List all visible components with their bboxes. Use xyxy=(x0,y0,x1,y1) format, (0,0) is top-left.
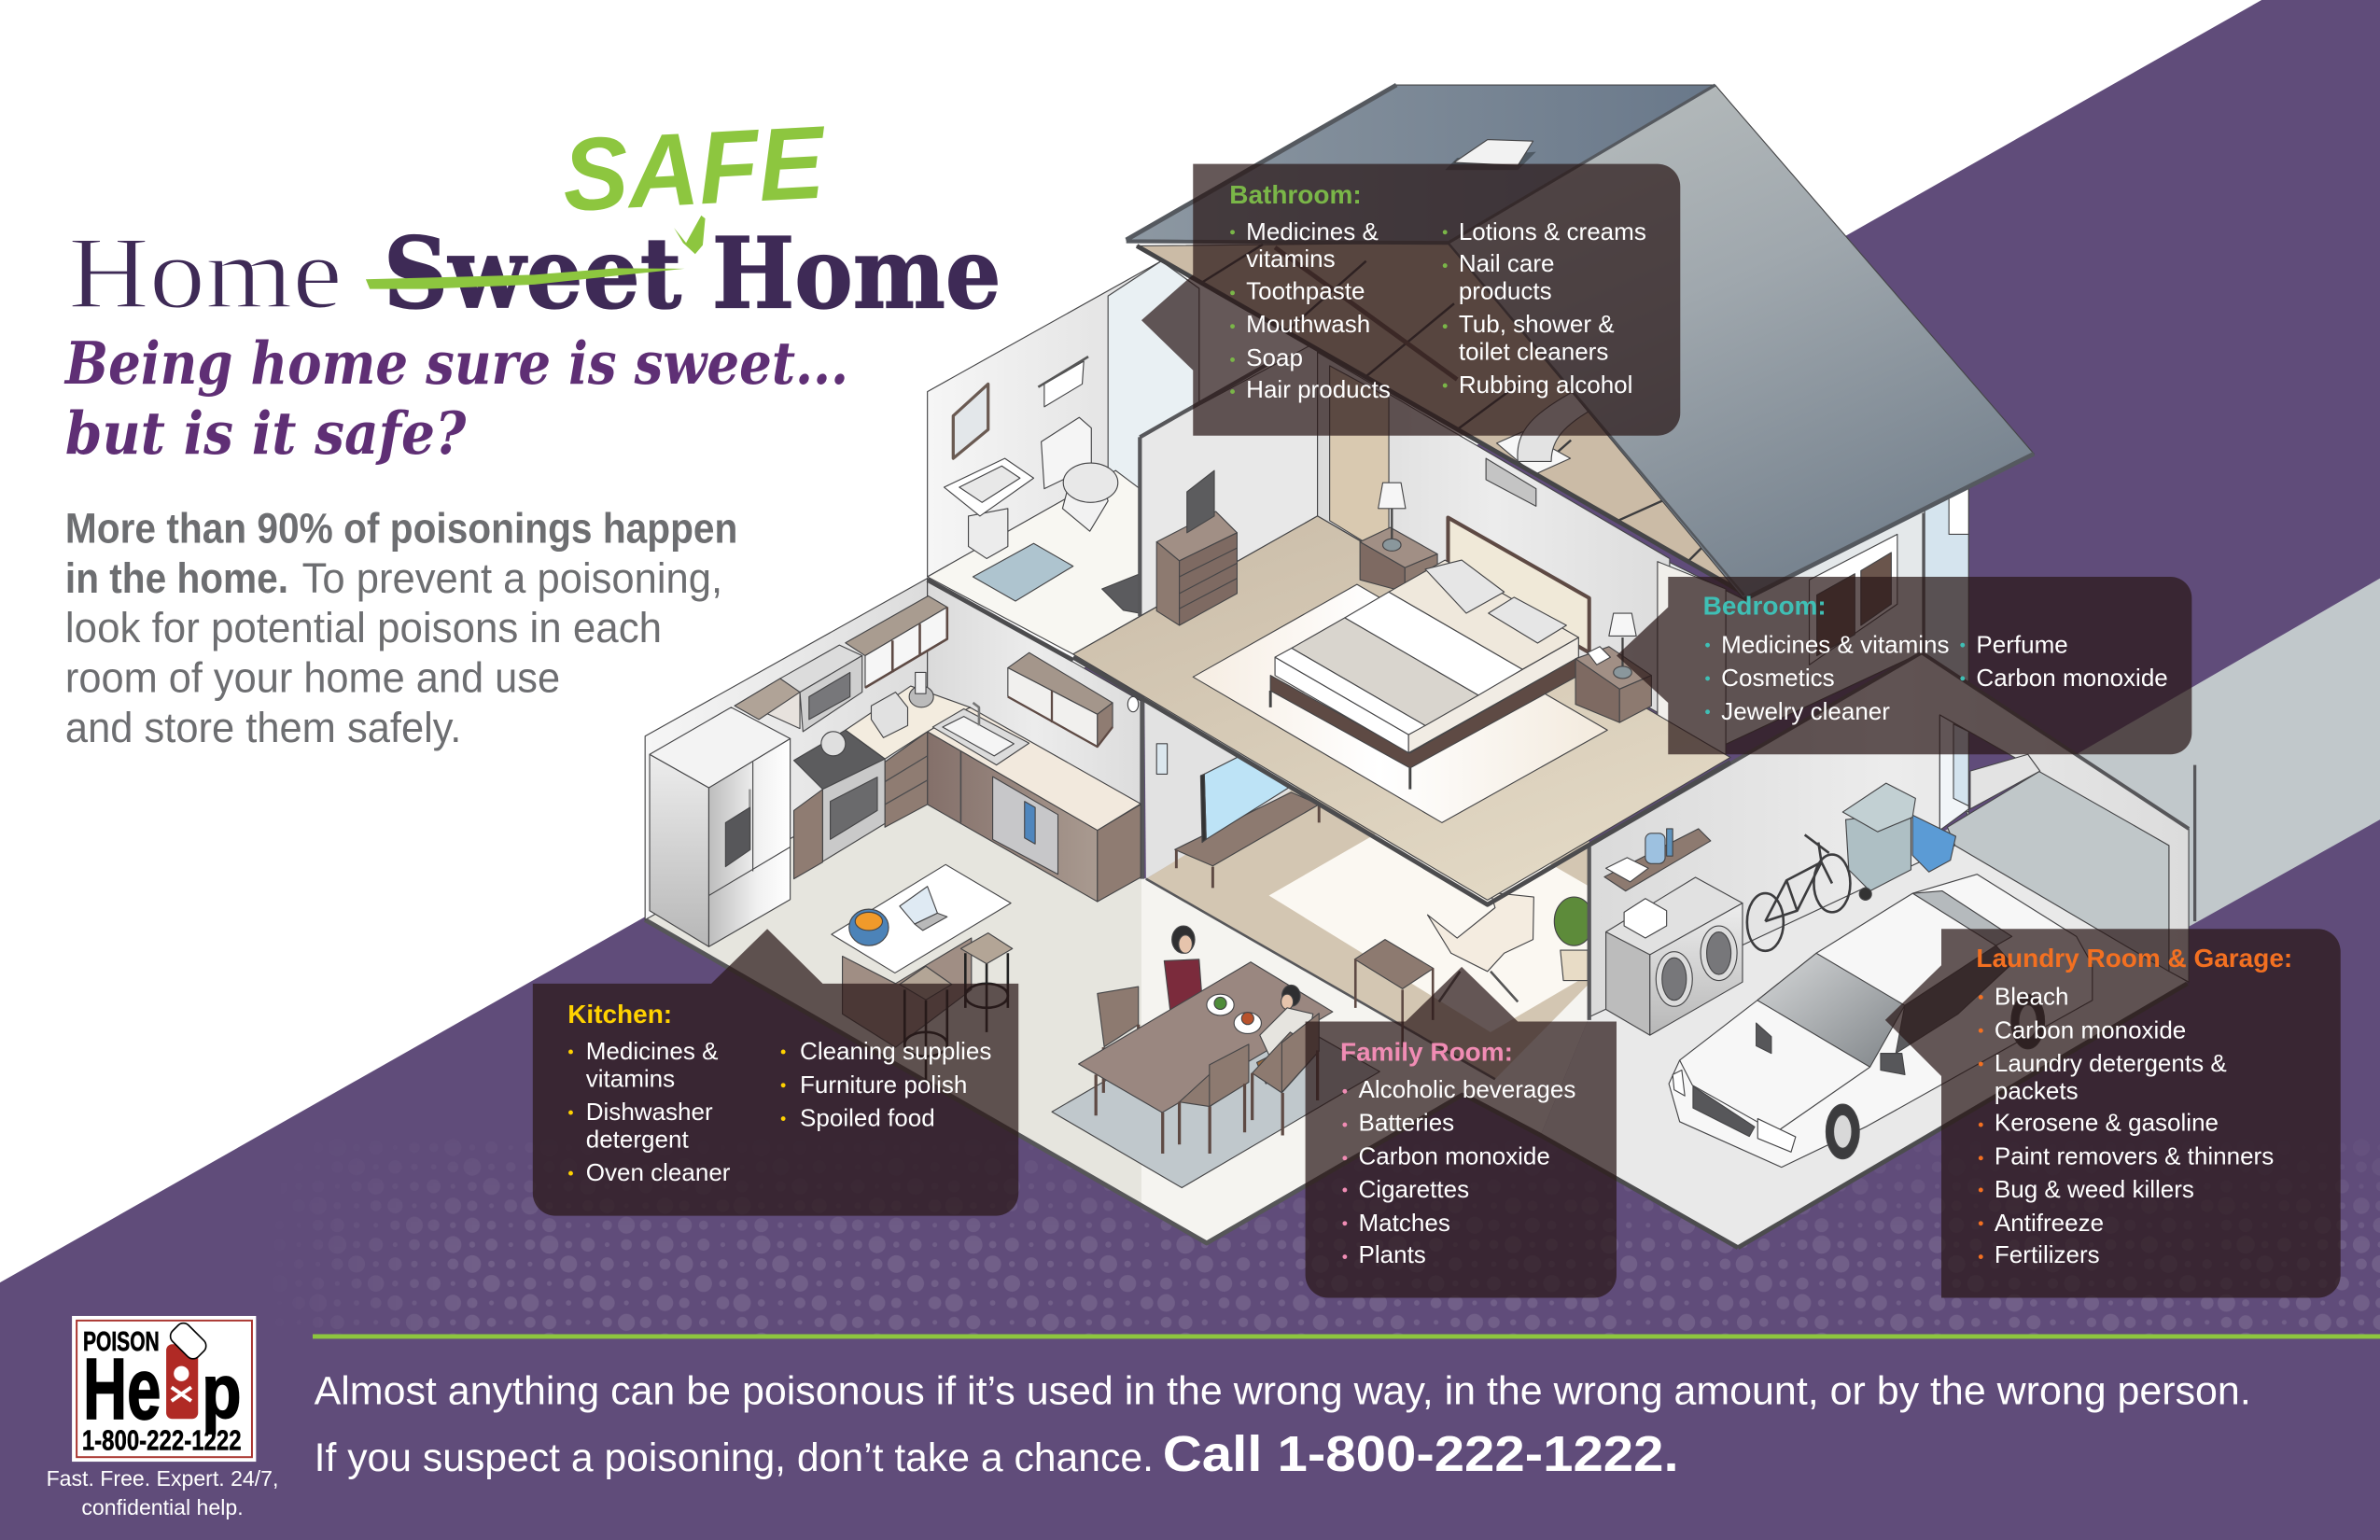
list: laundry and garage items: Laundry detergents & xyxy=(1995,1049,2227,1077)
list: kitchen items: Oven cleaner xyxy=(586,1158,731,1186)
list: bathroom items: Tub, shower & xyxy=(1459,310,1615,338)
heading: bedroom: Bedroom: xyxy=(1703,592,1827,621)
list: laundry and garage items: Bug & weed killers xyxy=(1995,1175,2194,1203)
list: bedroom items: Jewelry cleaner xyxy=(1721,697,1890,725)
list: laundry and garage items: Kerosene & gasoline xyxy=(1995,1109,2219,1137)
list: family room items: Cigarettes xyxy=(1359,1175,1469,1203)
list: family room items: Carbon monoxide xyxy=(1359,1141,1550,1169)
ground floor: dining and family area xyxy=(645,759,1589,1243)
list: bedroom items xyxy=(1705,630,2168,725)
tv and stand xyxy=(1175,757,1319,888)
laundry shelf, washer and dryer xyxy=(1604,829,1743,1035)
car xyxy=(1669,875,2093,1168)
list: kitchen items xyxy=(568,1037,991,1186)
footer message: Call 1-800-222-1222. xyxy=(1163,1426,1679,1482)
bathroom walls and shower xyxy=(928,261,1199,577)
intro paragraph: More than 90% of poisonings happen xyxy=(65,504,737,552)
handwritten word: safe with strike and caret xyxy=(366,105,830,289)
list: family room items: Matches xyxy=(1359,1209,1450,1237)
heading: kitchen: Kitchen: xyxy=(567,1000,672,1029)
panel: bedroom xyxy=(1617,577,2191,754)
logo: poison help: POISON xyxy=(83,1327,160,1357)
subtitle: but is it safe? xyxy=(65,399,467,468)
list: kitchen items: vitamins xyxy=(586,1064,675,1092)
list: kitchen items: Medicines & xyxy=(586,1037,718,1065)
list: laundry and garage items: Bleach xyxy=(1995,983,2068,1011)
list: kitchen items: detergent xyxy=(586,1125,689,1153)
panel: kitchen xyxy=(533,929,1018,1216)
bedroom walls xyxy=(1140,342,1726,756)
list: bedroom items: Perfume xyxy=(1976,630,2068,658)
list: kitchen items: Furniture polish xyxy=(800,1071,967,1099)
footer message xyxy=(315,1368,2251,1482)
upper exterior wall with windows xyxy=(1662,473,1968,832)
family room back wall and tan floor xyxy=(1144,691,1589,1079)
handwritten word: safe with strike and caret: SAFE xyxy=(560,105,830,233)
list: bathroom items: Soap xyxy=(1246,343,1303,371)
list: family room items: Plants xyxy=(1359,1240,1426,1268)
list: bathroom items: Rubbing alcohol xyxy=(1459,371,1632,399)
intro paragraph: look for potential poisons in each xyxy=(65,604,662,651)
panel: bathroom xyxy=(1141,164,1680,436)
dining table with people xyxy=(1052,926,1379,1188)
logo: poison help: 1-800-222-1222 xyxy=(82,1426,242,1457)
list: bathroom items: Mouthwash xyxy=(1246,310,1370,338)
list: bathroom items xyxy=(1230,217,1646,403)
intro paragraph: and store them safely. xyxy=(65,704,461,751)
intro paragraph: room of your home and use xyxy=(65,654,560,702)
logo: poison help: He xyxy=(83,1340,161,1437)
subtitle: Being home sure is sweet... xyxy=(63,329,848,398)
footer message: Almost anything can be poisonous if it’s used in the wrong way, in the wrong amount, or by the wrong person. xyxy=(315,1368,2251,1412)
title: Sweet xyxy=(384,217,681,331)
list: family room items: Alcoholic beverages xyxy=(1359,1075,1575,1103)
intro paragraph: To prevent a poisoning, xyxy=(302,554,722,602)
bathroom floor xyxy=(928,470,1140,660)
roof xyxy=(1127,85,2034,599)
icon: poison bottle xyxy=(166,1320,209,1419)
subtitle xyxy=(63,329,848,468)
wall shelf cabinet xyxy=(1008,652,1139,747)
list: bedroom items: Medicines & vitamins xyxy=(1721,630,1950,658)
illustration: isometric house cutaway xyxy=(645,85,2195,1248)
bathroom fixtures xyxy=(945,357,1140,613)
list: bathroom items: Lotions & creams xyxy=(1459,217,1646,245)
kitchen walls xyxy=(645,579,1142,920)
garage walls and floor xyxy=(1463,652,2195,1248)
driveway band xyxy=(1925,579,2380,1047)
title: Home xyxy=(712,217,1001,331)
right nightstand and lamp xyxy=(1575,613,1651,722)
logo tagline: confidential help. xyxy=(81,1495,244,1519)
list: bedroom items: Carbon monoxide xyxy=(1976,664,2168,692)
bedroom floor xyxy=(1073,516,1730,904)
panel: family room xyxy=(1306,967,1617,1297)
title xyxy=(68,216,1001,331)
logo tagline xyxy=(47,1466,278,1519)
footer message: If you suspect a poisoning, don’t take a chance. xyxy=(315,1435,1154,1479)
list: kitchen items: Dishwasher xyxy=(586,1098,713,1126)
list: laundry and garage items: Fertilizers xyxy=(1995,1240,2100,1268)
list: bathroom items: vitamins xyxy=(1246,245,1336,273)
dresser and television xyxy=(1156,470,1237,625)
title: Home xyxy=(68,216,343,330)
left nightstand and lamp xyxy=(1360,483,1437,592)
list: laundry and garage items xyxy=(1979,983,2274,1268)
list: family room items: Batteries xyxy=(1359,1109,1454,1137)
heading: bathroom: Bathroom: xyxy=(1229,180,1362,209)
logo tagline: Fast. Free. Expert. 24/7, xyxy=(47,1466,278,1491)
list: laundry and garage items: Carbon monoxide xyxy=(1995,1015,2186,1043)
list: bathroom items: Toothpaste xyxy=(1246,276,1365,304)
panel: laundry room and garage xyxy=(1885,929,2341,1297)
kitchen base cabinets and counter xyxy=(794,672,1141,902)
list: laundry and garage items: packets xyxy=(1995,1076,2079,1104)
list: family room items xyxy=(1342,1075,1575,1268)
kitchen island and stools xyxy=(832,864,1013,1081)
dot texture band xyxy=(357,1174,2380,1335)
list: kitchen items: Cleaning supplies xyxy=(800,1037,991,1065)
list: laundry and garage items: Antifreeze xyxy=(1995,1209,2104,1237)
intro paragraph xyxy=(65,504,737,751)
intro paragraph: in the home. xyxy=(65,554,288,602)
list: bathroom items: products xyxy=(1459,276,1552,304)
bicycle xyxy=(1747,834,1850,951)
kitchen upper cabinets and microwave xyxy=(735,595,947,732)
list: kitchen items: Spoiled food xyxy=(800,1104,935,1132)
logo: poison help: p xyxy=(202,1350,242,1435)
list: bedroom items: Cosmetics xyxy=(1721,664,1835,692)
heading: family room: Family Room: xyxy=(1340,1038,1513,1067)
refrigerator xyxy=(650,707,791,946)
attic with rafters xyxy=(1137,243,1744,594)
list: bathroom items: Nail care xyxy=(1459,249,1555,277)
bed xyxy=(1270,518,1589,790)
list: bathroom items: Medicines & xyxy=(1246,217,1379,245)
footer divider xyxy=(313,1334,2380,1338)
heading: laundry room and garage: Laundry Room & Garage: xyxy=(1976,944,2292,973)
family room furniture: side table, chair, plant xyxy=(1354,892,1594,1047)
list: bathroom items: toilet cleaners xyxy=(1459,337,1608,365)
bedroom rug xyxy=(1193,584,1607,822)
list: bathroom items: Hair products xyxy=(1246,375,1391,403)
trash bin and basket xyxy=(1842,783,1955,900)
logo: poison help xyxy=(72,1316,256,1462)
list: laundry and garage items: Paint removers & thinners xyxy=(1995,1141,2274,1169)
